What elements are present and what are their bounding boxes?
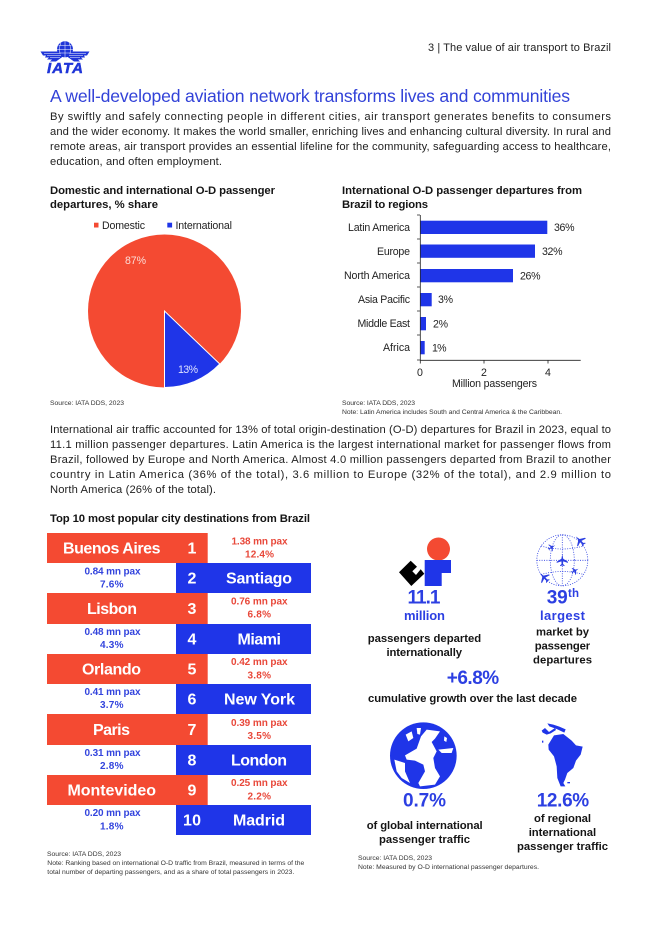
row 10: 0.20 mn pax <box>84 808 141 819</box>
source: key statistics: Source: IATA DDS, 2023 <box>358 855 432 862</box>
source: key statistics: Note: Measured by O-D international passenger departures. <box>358 864 539 871</box>
stat: 39th largest <box>533 588 592 666</box>
intro paragraph: remote areas, air transport provides an essential lifeline for the community, safeguarding access to healthcare, <box>50 141 611 153</box>
stat: passengers departed <box>368 588 481 659</box>
value labels: 26% <box>520 270 541 282</box>
stat: 39th largest: departures <box>533 654 592 666</box>
category labels: Asia Pacific <box>358 294 411 306</box>
row 7: 7 <box>188 722 196 739</box>
source: bar chart <box>342 400 562 416</box>
row 7: 0.39 mn pax <box>231 718 288 729</box>
title: A well-developed aviation network transforms lives and communities <box>50 86 570 106</box>
value labels: 3% <box>438 294 454 306</box>
stat: 39th largest: largest <box>540 608 586 623</box>
stat: global share: passenger traffic <box>379 834 470 846</box>
row 1: 12.4% <box>245 550 274 560</box>
stat: growth: +6.8% <box>447 668 499 689</box>
body paragraph: country in Latin America (36% of the total), 3.6 million to Europe (32% of the total), and 2.9 million to <box>50 469 611 481</box>
row 9: 0.25 mn pax <box>231 778 288 789</box>
row 2: 2 <box>188 570 196 588</box>
row 3: 0.76 mn pax <box>231 596 288 608</box>
legend: pie chart: International <box>176 220 232 232</box>
row 9 <box>47 775 288 805</box>
source: key statistics <box>358 855 539 871</box>
stat: regional share <box>517 790 608 853</box>
intro paragraph: and the wider economy. It makes the world smaller, enriching lives and enhancing cultural diversity. In rural and <box>50 126 611 138</box>
row 3 <box>47 593 288 624</box>
stat: 39th largest: th <box>568 588 579 600</box>
row 3: 3 <box>188 601 196 618</box>
row 4: 0.48 mn pax <box>84 627 141 638</box>
source: bar chart: Source: IATA DDS, 2023 <box>342 400 415 407</box>
row 8: London <box>231 752 287 770</box>
row 1: 1.38 mn pax <box>232 536 288 548</box>
category labels: Europe <box>377 246 410 258</box>
category labels: Africa <box>383 342 410 354</box>
row 9: 2.2% <box>248 792 271 802</box>
heading: pie chart: departures, % share <box>50 199 158 211</box>
icon: South America map <box>542 723 583 786</box>
stat: passengers departed: 11.1 <box>408 588 441 608</box>
category labels: North America <box>344 270 410 282</box>
row 1: Buenos Aires <box>63 540 161 558</box>
body paragraph <box>50 424 611 496</box>
heading: bar chart <box>342 185 582 211</box>
heading: top 10: Top 10 most popular city destinations from Brazil <box>50 513 310 525</box>
heading: bar chart: Brazil to regions <box>342 199 428 211</box>
stat: regional share: passenger traffic <box>517 841 608 853</box>
stat: 39th largest: market by <box>536 626 590 638</box>
legend: pie chart: Domestic <box>102 220 146 232</box>
axis labels: Million passengers <box>452 378 537 390</box>
stat: regional share: of regional <box>534 813 591 825</box>
row 1 <box>47 533 288 563</box>
stat: regional share: 12.6% <box>537 790 589 812</box>
row 2: 7.6% <box>100 580 124 590</box>
source: bar chart: Note: Latin America includes South and Central America & the Caribbean. <box>342 409 562 416</box>
source: top 10 <box>47 851 305 876</box>
heading: bar chart: International O-D passenger departures from <box>342 185 582 197</box>
axes <box>417 215 581 364</box>
body paragraph: Brazil, followed by Europe and North America. Almost 4.0 million passengers departed from Brazil to another <box>50 454 611 466</box>
category labels: Latin America <box>348 222 410 234</box>
stat: passengers departed: internationally <box>386 647 463 659</box>
intro paragraph: education, and often employment. <box>50 156 222 168</box>
intro paragraph: By swiftly and safely connecting people in different cities, air transport generates benefits to consumers <box>50 111 611 123</box>
row 6: 0.41 mn pax <box>84 687 141 698</box>
stat: global share: of global international <box>367 820 483 832</box>
row 9: 9 <box>188 782 196 800</box>
value labels: 2% <box>433 318 449 330</box>
row 8: 2.8% <box>100 761 124 772</box>
row 3: 6.8% <box>248 610 271 620</box>
row 2 <box>84 563 311 593</box>
body paragraph: 11.1 million passenger departures. Latin America is the largest international market for passenger flows from <box>50 439 611 451</box>
axis labels: 4 <box>545 367 551 379</box>
row 6: 3.7% <box>100 700 124 711</box>
row 6: New York <box>224 692 295 708</box>
row 10 <box>84 805 311 835</box>
row 6: 6 <box>188 692 196 708</box>
row 7: 3.5% <box>248 731 271 742</box>
icon: IATA logo <box>40 41 90 77</box>
row 1: 1 <box>188 540 196 558</box>
value labels: 32% <box>542 246 563 258</box>
value labels: 36% <box>554 222 575 234</box>
row 2: Santiago <box>226 570 292 588</box>
row 5: 3.8% <box>248 670 271 682</box>
body paragraph: International air traffic accounted for 13% of total origin-destination (O-D) departures for Brazil in 2023, equal to <box>50 424 611 436</box>
source: top 10: Note: Ranking based on international O-D traffic from Brazil, measured in terms of the <box>47 860 305 867</box>
stat: global share <box>367 790 483 846</box>
row 10: 1.8% <box>100 822 124 832</box>
row 10: 10 <box>183 812 201 830</box>
row 9: Montevideo <box>68 782 156 800</box>
stat: passengers departed: passengers departed <box>368 633 481 645</box>
row 4: 4 <box>188 632 196 648</box>
row 4: Miami <box>238 632 281 648</box>
panel: pie chart <box>50 185 276 407</box>
row 5: Orlando <box>82 662 141 678</box>
pie: share of departures: 87% <box>125 255 147 267</box>
stat: growth <box>368 668 577 705</box>
row 10: Madrid <box>233 812 285 830</box>
panel: bar chart <box>342 185 582 416</box>
icon: world globe <box>390 722 457 789</box>
heading: pie chart <box>50 185 276 211</box>
source: top 10: Source: IATA DDS, 2023 <box>47 851 121 858</box>
row 7: Paris <box>93 722 130 739</box>
stat: global share: 0.7% <box>403 790 446 812</box>
value labels: 1% <box>432 342 447 354</box>
row 4 <box>84 624 311 654</box>
row 3: Lisbon <box>87 601 137 618</box>
row 5 <box>47 654 288 684</box>
panel: key statistics <box>358 532 608 871</box>
source: top 10: total number of departing passengers, and as a share of total passengers in 2023. <box>47 869 294 876</box>
panel: top 10 destinations <box>47 513 311 876</box>
category labels <box>344 222 411 354</box>
stat: regional share: international <box>529 827 596 839</box>
row 8: 0.31 mn pax <box>84 748 141 759</box>
axis labels <box>417 367 551 390</box>
body paragraph: North America (26% of the total). <box>50 484 216 496</box>
value labels <box>432 222 575 354</box>
stat: 39th largest: 39 <box>547 588 568 608</box>
icon: network globe with planes <box>536 532 588 586</box>
pie: share of departures <box>88 234 241 388</box>
row 2: 0.84 mn pax <box>84 566 141 578</box>
axis labels: 0 <box>417 367 423 379</box>
icon: IATA logo: IATA <box>47 60 83 77</box>
row 8 <box>84 745 311 775</box>
heading: pie chart: Domestic and international O-D passenger <box>50 185 276 197</box>
row 4: 4.3% <box>100 640 124 651</box>
axis labels: 2 <box>481 367 487 379</box>
legend: pie chart <box>94 220 232 232</box>
row 6 <box>84 684 311 714</box>
page header: 3 | The value of air transport to Brazil <box>428 42 611 54</box>
stat: 39th largest: passenger <box>535 640 591 652</box>
row 8: 8 <box>188 752 196 770</box>
row 7 <box>47 714 288 745</box>
stat: passengers departed: million <box>404 608 445 623</box>
row 5: 5 <box>188 662 196 678</box>
bars <box>420 221 547 354</box>
stat: growth: cumulative growth over the last decade <box>368 693 577 705</box>
pie: share of departures: 13% <box>178 364 199 376</box>
row 5: 0.42 mn pax <box>231 657 288 668</box>
category labels: Middle East <box>358 318 410 330</box>
icon: passengers <box>399 538 451 586</box>
intro paragraph <box>50 111 611 168</box>
source: pie chart: Source: IATA DDS, 2023 <box>50 400 124 407</box>
